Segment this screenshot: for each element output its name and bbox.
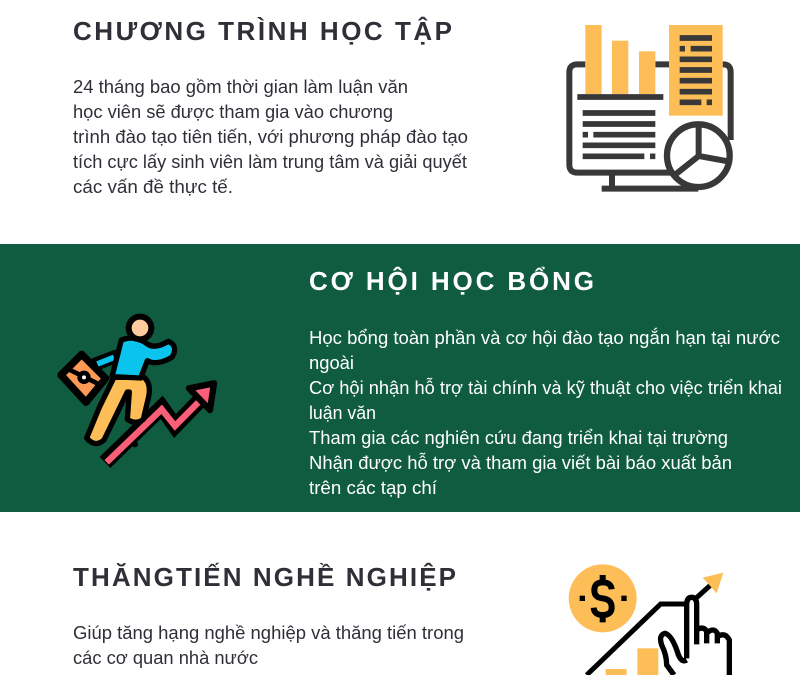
panel: thăng tiến nghề nghiệp bbox=[0, 512, 800, 675]
hand bbox=[661, 597, 729, 675]
text block: scholarship opportunities bbox=[309, 327, 782, 498]
growth line bbox=[587, 585, 711, 675]
text block: scholarship opportunities: Cơ hội nhận hỗ trợ tài chính và kỹ thuật cho việc triển khai bbox=[309, 377, 782, 398]
text block: career advancement: Giúp tăng hạng nghề nghiệp và thăng tiến trong bbox=[73, 623, 464, 643]
text block: programme description bbox=[73, 77, 468, 197]
heading: chương trình học tập: CHƯƠNG TRÌNH HỌC TẬP bbox=[73, 16, 452, 46]
text block: programme description: 24 tháng bao gồm thời gian làm luận văn bbox=[73, 77, 408, 97]
text block: programme description: tích cực lấy sinh viên làm trung tâm và giải quyết bbox=[73, 152, 467, 172]
text block: scholarship opportunities: ngoài bbox=[309, 353, 354, 373]
bars bbox=[637, 648, 658, 675]
text block: career advancement: các cơ quan nhà nước bbox=[73, 648, 258, 668]
heading: thăng tiến nghề nghiệp: THĂNGTIẾN NGHỀ NGHIỆP bbox=[73, 562, 456, 592]
torso bbox=[112, 338, 175, 378]
dollar coin bbox=[569, 564, 637, 632]
panel: cơ hội học bổng bbox=[0, 244, 800, 512]
text block: programme description: các vấn đề thực tế. bbox=[73, 177, 233, 197]
text block: scholarship opportunities: trên các tạp chí bbox=[309, 478, 437, 498]
text block: programme description: trình đào tạo tiên tiến, với phương pháp đào tạo bbox=[73, 127, 468, 147]
text block: career advancement bbox=[73, 623, 464, 668]
head bbox=[129, 317, 151, 339]
briefcase bbox=[61, 354, 115, 402]
text block: scholarship opportunities: Nhận được hỗ trợ và tham gia viết bài báo xuất bản bbox=[309, 452, 732, 473]
arrow head bbox=[703, 573, 723, 593]
icon: businessman climbing rising arrow bbox=[61, 317, 214, 462]
text block: scholarship opportunities: Tham gia các nghiên cứu đang triển khai tại trường bbox=[309, 428, 728, 448]
heading: cơ hội học bổng: CƠ HỘI HỌC BỔNG bbox=[309, 266, 594, 296]
text block: scholarship opportunities: Học bổng toàn phần và cơ hội đào tạo ngắn hạn tại nước bbox=[309, 327, 780, 348]
legs bbox=[87, 377, 149, 444]
text block: scholarship opportunities: luận văn bbox=[309, 403, 376, 423]
panel: chương trình học tập bbox=[0, 0, 800, 244]
icon: monitor with charts and document bbox=[569, 25, 731, 189]
text block: programme description: học viên sẽ được tham gia vào chương bbox=[73, 102, 393, 122]
icon: hand pointing at rising graph with dollar coin bbox=[569, 564, 729, 675]
arrow bbox=[93, 383, 214, 462]
